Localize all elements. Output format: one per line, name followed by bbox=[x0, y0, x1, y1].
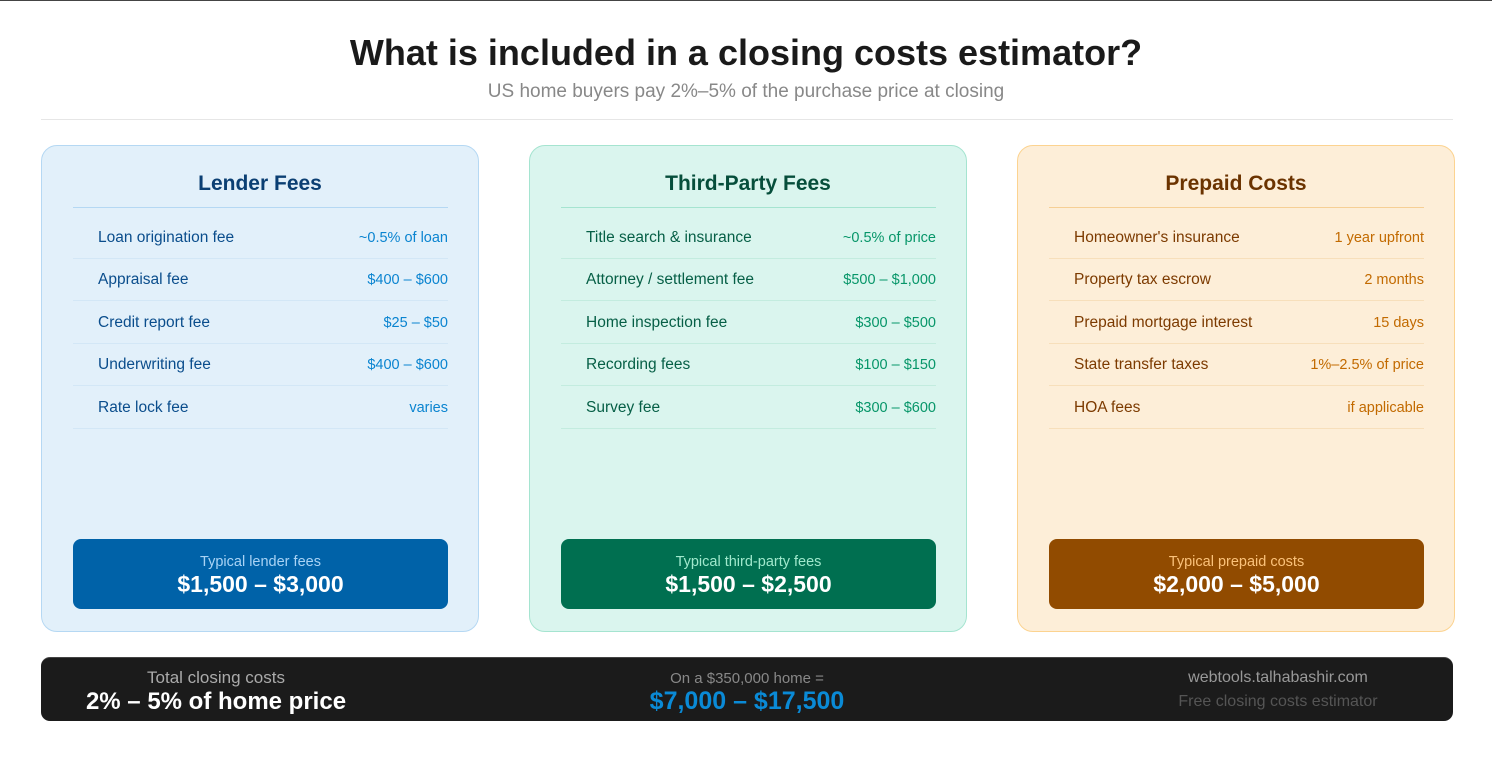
panel: third-party fees: $300 – $600 bbox=[855, 400, 936, 416]
panel: third-party fees: ~0.5% of price bbox=[843, 230, 936, 246]
total box: prepaid bbox=[1049, 539, 1424, 609]
panel: lender fees: varies bbox=[409, 400, 448, 416]
summary: example home bbox=[650, 670, 844, 715]
fee list: prepaid bbox=[1049, 229, 1424, 429]
panel: third-party fees: Title search & insurance bbox=[586, 229, 752, 246]
panel: third-party fees: Attorney / settlement fee bbox=[586, 271, 754, 288]
panel: lender fees: Rate lock fee bbox=[98, 399, 188, 416]
panel: prepaid costs: HOA fees bbox=[1074, 399, 1140, 416]
panel: prepaid costs: 1 year upfront bbox=[1335, 230, 1424, 246]
panel: lender fees: ~0.5% of loan bbox=[359, 230, 448, 246]
total box: prepaid: $2,000 – $5,000 bbox=[1153, 571, 1320, 597]
panel: third-party fees: $500 – $1,000 bbox=[843, 272, 936, 288]
panel: lender fees: Loan origination fee bbox=[98, 229, 234, 246]
panel: third-party fees: Recording fees bbox=[586, 356, 690, 373]
panel: lender fees: $25 – $50 bbox=[383, 315, 448, 331]
heading: third-party fees: Third-Party Fees bbox=[665, 172, 831, 195]
summary: site credit: webtools.talhabashir.com bbox=[1188, 669, 1368, 686]
panel: prepaid costs: if applicable bbox=[1347, 400, 1424, 416]
total box: third-party bbox=[561, 539, 936, 609]
panel: third-party fees: Survey fee bbox=[586, 399, 660, 416]
summary: example home: On a $350,000 home = bbox=[670, 670, 824, 687]
heading: lender fees: Lender Fees bbox=[198, 172, 322, 195]
panel: lender fees: Credit report fee bbox=[98, 314, 210, 331]
panel: prepaid costs: State transfer taxes bbox=[1074, 356, 1208, 373]
summary: total closing costs: 2% – 5% of home price bbox=[86, 688, 346, 715]
panel: lender fees: $400 – $600 bbox=[367, 272, 448, 288]
summary: total closing costs bbox=[86, 668, 346, 715]
panel: prepaid costs: 2 months bbox=[1364, 272, 1424, 288]
panel: prepaid costs bbox=[1017, 145, 1455, 632]
panel: lender fees: $400 – $600 bbox=[367, 357, 448, 373]
panel: third-party fees: $100 – $150 bbox=[855, 357, 936, 373]
panel: prepaid costs: 15 days bbox=[1373, 315, 1424, 331]
panel: lender fees: Appraisal fee bbox=[98, 271, 188, 288]
panel: third-party fees bbox=[529, 145, 967, 632]
panel: lender fees: Underwriting fee bbox=[98, 356, 211, 373]
total box: lender: $1,500 – $3,000 bbox=[177, 571, 344, 597]
total box: prepaid: Typical prepaid costs bbox=[1169, 554, 1304, 570]
total box: third-party: Typical third-party fees bbox=[676, 554, 821, 570]
summary: total closing costs: Total closing costs bbox=[147, 668, 285, 687]
summary bar bbox=[41, 657, 1453, 721]
fee list: lender bbox=[73, 229, 448, 429]
summary: site credit bbox=[1178, 669, 1378, 710]
panel: prepaid costs: Property tax escrow bbox=[1074, 271, 1211, 288]
panel: third-party fees: $300 – $500 bbox=[855, 315, 936, 331]
summary: example home: $7,000 – $17,500 bbox=[650, 687, 844, 715]
heading: prepaid costs: Prepaid Costs bbox=[1165, 172, 1307, 195]
summary: site credit: Free closing costs estimator bbox=[1178, 693, 1378, 710]
subtitle: US home buyers pay 2%–5% of the purchase price at closing bbox=[488, 81, 1004, 102]
total box: third-party: $1,500 – $2,500 bbox=[665, 571, 832, 597]
panel: third-party fees: Home inspection fee bbox=[586, 314, 727, 331]
title: What is included in a closing costs estimator? bbox=[350, 32, 1142, 73]
fee list: third-party bbox=[561, 229, 936, 429]
panel: prepaid costs: Homeowner's insurance bbox=[1074, 229, 1240, 246]
panel: prepaid costs: Prepaid mortgage interest bbox=[1074, 314, 1252, 331]
total box: lender bbox=[73, 539, 448, 609]
panel: lender fees bbox=[41, 145, 479, 632]
total box: lender: Typical lender fees bbox=[200, 554, 321, 570]
panel: prepaid costs: 1%–2.5% of price bbox=[1310, 357, 1424, 373]
